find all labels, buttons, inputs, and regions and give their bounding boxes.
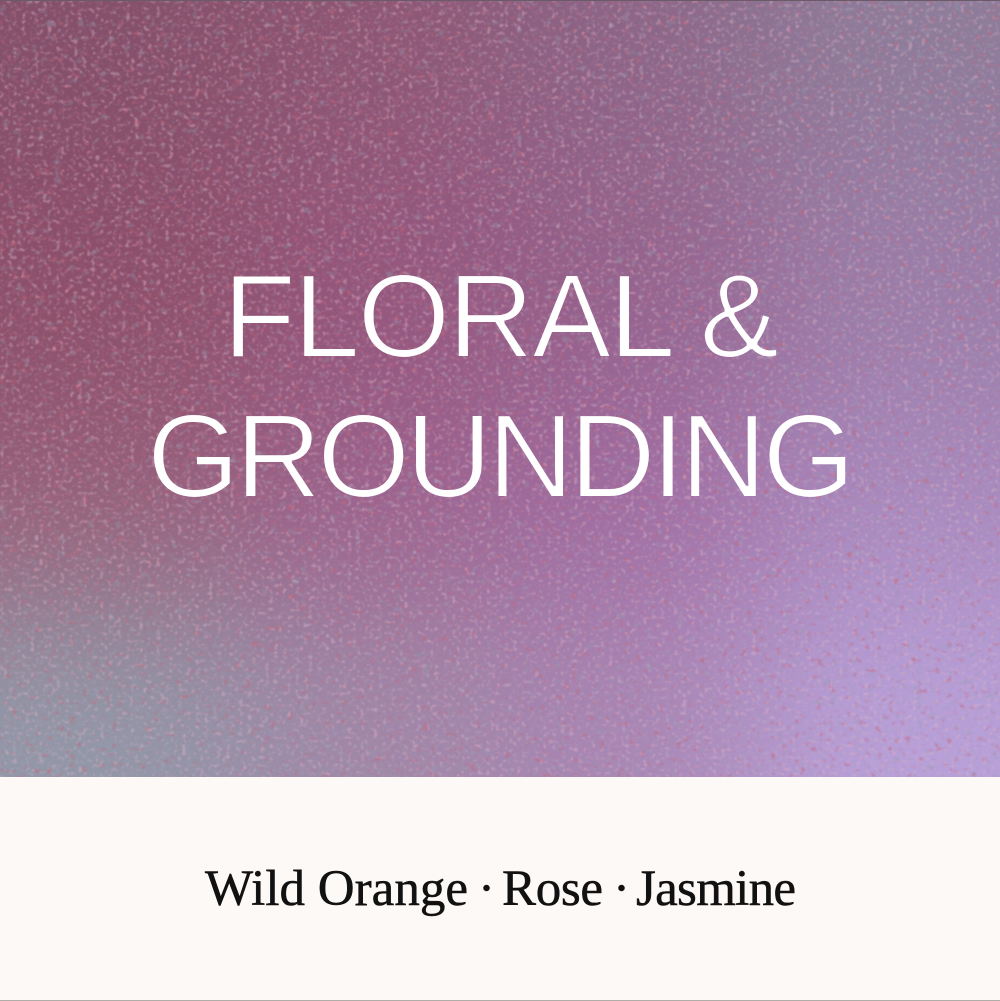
subtitle: ingredient list: · [613, 861, 630, 917]
subtitle: ingredient list: Rose [502, 861, 603, 917]
subtitle: ingredient list: Jasmine [636, 861, 796, 917]
title: FLORAL & [223, 250, 779, 383]
subtitle: ingredient list: · [478, 861, 495, 917]
panel: textured gradient background [0, 1, 1000, 777]
subtitle: ingredient list: Wild Orange [205, 861, 468, 917]
bottom edge line [0, 1000, 1000, 1001]
title [147, 250, 855, 523]
top edge line [0, 0, 1000, 1]
title: GROUNDING [147, 390, 855, 523]
